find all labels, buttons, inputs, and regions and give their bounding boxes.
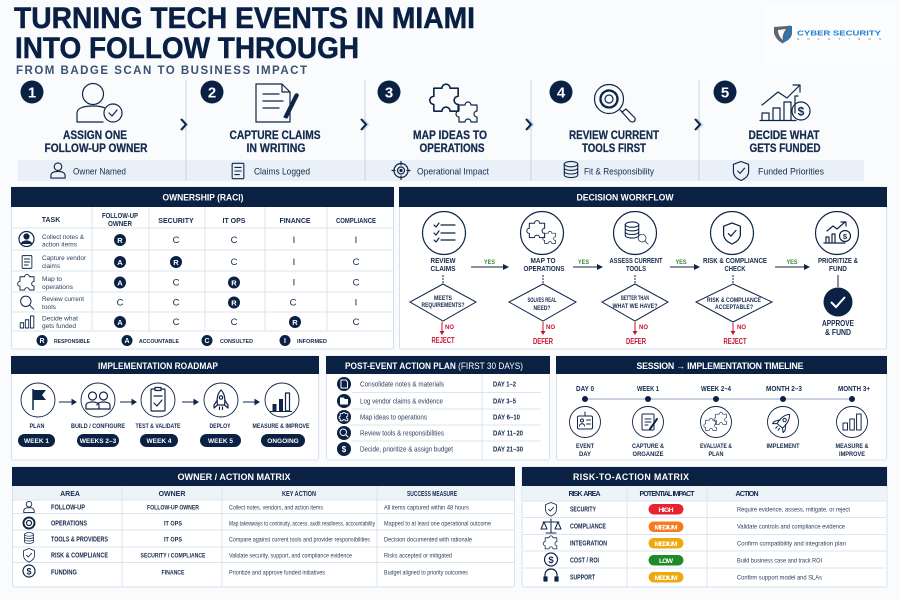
stage: assess current tools [610, 212, 663, 273]
decision: better than what we have: WHAT WE HAVE? [612, 303, 658, 310]
stage: build / configure: WEEKS 2–3 [80, 438, 117, 445]
row: operations: IT OPS [164, 520, 183, 528]
stage: assess current tools: TOOLS [626, 264, 646, 273]
row: decide what gets funded [20, 316, 360, 330]
step heading [44, 128, 148, 155]
column header row: SUCCESS MEASURE [407, 491, 457, 498]
decision: meets requirements: NO [445, 325, 454, 331]
row: decide what gets funded: C [353, 317, 360, 328]
row: capture vendor claims: I [293, 257, 295, 268]
table header row: FINANCE [279, 218, 311, 225]
panel header [11, 356, 319, 374]
row: review current tools: C [117, 298, 124, 308]
step heading [748, 128, 821, 155]
step 5 [714, 80, 824, 180]
row: tools and providers [24, 533, 472, 544]
arrow: yes 4 [775, 259, 810, 270]
decision: better than what we have: BETTER THAN [621, 295, 649, 302]
panel: ownership RACI [11, 187, 394, 349]
subtitle: FROM BADGE SCAN TO BUSINESS IMPACT [16, 65, 307, 77]
row: capture vendor claims [22, 255, 360, 270]
column header row: ACTION [736, 491, 758, 498]
row: funding: FINANCE [162, 570, 185, 576]
row: decide and budget: $ [342, 445, 347, 454]
row: review current tools: Review current [42, 296, 84, 303]
stage: plan: PLAN [30, 423, 45, 430]
panel: implementation roadmap [11, 356, 319, 460]
milestone: month 3+: IMPROVE [839, 451, 865, 458]
row: review tools [337, 426, 523, 440]
row: map ideas [337, 410, 520, 424]
row: capture vendor claims: Capture vendor [42, 255, 87, 262]
arrow: yes 3: YES [676, 259, 687, 266]
decision: meets requirements [410, 275, 476, 345]
step heading: ASSIGN ONE [63, 128, 127, 142]
row: tools and providers: Compare against current tools and provider responsibilities [229, 536, 371, 544]
panel header [522, 467, 887, 486]
step outcome: Fit & Responsibility [584, 166, 654, 178]
step 2 [200, 80, 320, 179]
row: decide what gets funded: C [231, 317, 238, 328]
row: risk and compliance: RISK & COMPLIANCE [51, 552, 108, 560]
legend: A [124, 338, 130, 345]
step heading: DECIDE WHAT [748, 128, 820, 142]
stage: assess current tools: ASSESS CURRENT [610, 256, 663, 265]
table grid [13, 486, 514, 587]
stage: prioritize and fund: $ [843, 232, 848, 241]
icon: puzzle pieces [430, 84, 477, 122]
row: log vendor claims: Log vendor claims & evidence [360, 398, 443, 406]
row: map to operations [18, 274, 360, 291]
legend: CONSULTED [220, 339, 253, 345]
stage: map to operations: OPERATIONS [524, 264, 564, 273]
column header row: POTENTIAL IMPACT [640, 491, 695, 498]
decision: risk and compliance acceptable: REJECT [724, 337, 747, 346]
step outcome: Funded Priorities [758, 166, 824, 178]
title: INTO FOLLOW THROUGH [15, 32, 359, 65]
arrow: yes 3 [670, 259, 700, 270]
row: follow-up: All items captured within 48 hours [384, 504, 470, 512]
row: integration [543, 536, 846, 549]
row: map to operations: I [293, 278, 295, 288]
row lines [352, 374, 541, 459]
row: decide and budget [337, 442, 523, 456]
row: risk and compliance: Risks accepted or mitigated [384, 552, 452, 560]
row: review tools: DAY 11–20 [493, 430, 523, 438]
stage: test and validate: WEEK 4 [147, 438, 172, 445]
stage: build / configure: BUILD / CONFIGURE [71, 423, 126, 430]
row: tools and providers: TOOLS & PROVIDERS [51, 536, 108, 544]
step outcome: Operational Impact [417, 166, 489, 178]
row: capture vendor claims: R [173, 258, 179, 267]
outcome: approve and fund: & FUND [825, 328, 851, 337]
milestone: day 0: DAY [579, 451, 591, 458]
step heading [413, 128, 487, 155]
arrow: yes 2: YES [578, 259, 590, 266]
row: integration: MEDIUM [654, 541, 678, 548]
row: compliance: Validate controls and compliance evidence [737, 524, 845, 530]
number badge 4: 4 [557, 84, 566, 102]
milestone: day 0: DAY 0 [576, 384, 594, 393]
step heading: CAPTURE CLAIMS [230, 128, 320, 142]
legend: ACCOUNTABLE [139, 339, 179, 345]
number badge 1: 1 [28, 84, 36, 102]
step heading: IN WRITING [246, 141, 306, 155]
legend: INFORMED [297, 339, 327, 345]
table header row: IT OPS [223, 218, 246, 225]
panel: owner / action matrix [12, 467, 515, 587]
panel header [326, 356, 550, 374]
row: compliance: MEDIUM [654, 524, 678, 532]
row: review current tools: C [173, 298, 180, 308]
decision: better than what we have: DEFER [626, 337, 646, 346]
step heading: MAP IDEAS TO [413, 128, 487, 142]
row: decide what gets funded: Decide what [42, 316, 78, 322]
row: decide what gets funded: A [117, 318, 123, 327]
row: risk and compliance [24, 549, 452, 562]
row: cost / ROI: Build business case and track ROI [737, 558, 822, 564]
number badge 3: 3 [385, 84, 393, 102]
step 3 [378, 80, 489, 180]
stage: plan [18, 383, 55, 447]
row: cost / ROI: LOW [659, 558, 674, 565]
decision: risk and compliance acceptable [696, 275, 772, 346]
stage: review claims [422, 212, 466, 273]
step outcome: Claims Logged [254, 166, 310, 178]
row: operations: OPERATIONS [51, 520, 87, 528]
stage: measure and improve [252, 383, 310, 447]
table header row: OWNER [108, 221, 132, 228]
milestone: week 2-4: WEEK 2–4 [701, 384, 732, 393]
row: tools and providers: IT OPS [164, 536, 183, 544]
milestone: week 1: CAPTURE & [632, 443, 664, 450]
row: collect notes: R [117, 236, 123, 245]
row: operations: Map takeaways to continuity, access, audit readiness, accountability [229, 520, 376, 528]
row: follow-up: Collect notes, vendors, and action items [229, 504, 324, 512]
title [14, 2, 475, 65]
stage: prioritize and fund [816, 212, 858, 273]
legend: I [284, 338, 286, 345]
panel header: OWNERSHIP (RACI) [162, 192, 244, 202]
title: TURNING TECH EVENTS IN MIAMI [14, 2, 475, 35]
row: funding: Prioritize and approve funded initiatives [229, 570, 326, 576]
row: cost / ROI: COST / ROI [570, 558, 599, 564]
stage: review claims: REVIEW [430, 256, 456, 265]
column header row: AREA [60, 491, 80, 498]
milestone: week 2-4 [700, 384, 732, 458]
panel: decision workflow [399, 187, 887, 349]
arrow [59, 400, 76, 404]
decision: solves real need: NO [546, 325, 555, 331]
step outcome: Owner Named [73, 166, 126, 178]
stage: risk and compliance check: CHECK [724, 264, 746, 273]
milestone: month 2-3 [766, 384, 802, 450]
step heading: GETS FUNDED [750, 141, 821, 155]
row: support: MEDIUM [654, 575, 678, 582]
stage: risk and compliance check [703, 212, 767, 273]
arrow [182, 400, 198, 404]
row: map to operations: C [353, 278, 360, 288]
panel header: POST-EVENT ACTION PLAN (FIRST 30 DAYS) [345, 361, 523, 371]
row: tools and providers: Decision documented with rationale [384, 536, 472, 544]
decision: meets requirements: REQUIREMENTS? [422, 302, 465, 309]
row: map to operations: operations [42, 284, 74, 291]
stage: test and validate: TEST & VALIDATE [136, 423, 181, 430]
step heading: OPERATIONS [420, 141, 484, 155]
row: compliance: COMPLIANCE [570, 524, 606, 530]
logo: Cyber Security Solutions: SOLUTIONS [797, 37, 881, 41]
stage: risk and compliance check: RISK & COMPLIANCE [703, 256, 767, 265]
row: integration: Confirm compatibility and integration plan [737, 540, 846, 548]
row: review current tools: I [355, 298, 357, 308]
panel header: SESSION → IMPLEMENTATION TIMELINE [636, 361, 804, 371]
outcome: approve and fund: APPROVE [822, 319, 855, 328]
row: consolidate notes [337, 377, 516, 391]
step heading: FOLLOW-UP OWNER [44, 141, 148, 155]
row: follow-up [24, 501, 470, 513]
stage: deploy: DEPLOY [210, 423, 231, 430]
row: integration: INTEGRATION [570, 540, 607, 548]
decision: risk and compliance acceptable: ACCEPTABLE? [715, 304, 753, 311]
row: review current tools [21, 296, 357, 311]
legend: RESPONSIBLE [54, 339, 90, 345]
stage: prioritize and fund: PRIORITIZE & [818, 256, 858, 265]
row: follow-up: FOLLOW-UP [51, 504, 85, 512]
row: funding: Budget aligned to priority outcomes [384, 570, 469, 576]
row: consolidate notes: DAY 1–2 [493, 382, 516, 388]
stage: deploy [200, 383, 241, 447]
logo: Cyber Security Solutions [765, 5, 895, 63]
row: security: Require evidence, assess, mitigate, or reject [737, 506, 850, 514]
table grid [523, 486, 886, 587]
column header row: OWNER [159, 491, 185, 498]
stage: map to operations [520, 212, 564, 273]
row: decide what gets funded: gets funded [42, 323, 76, 330]
row: collect notes: C [173, 235, 180, 246]
decision: better than what we have [602, 275, 668, 346]
step dividers and chevrons [181, 80, 702, 181]
milestone: week 2-4: PLAN [708, 451, 724, 458]
stage: map to operations: MAP TO [530, 256, 556, 265]
decision: solves real need [509, 275, 576, 346]
timeline line [585, 398, 852, 400]
icon: owner with check [77, 84, 122, 122]
row: log vendor claims: DAY 3–5 [493, 398, 516, 406]
icon: growth bars and dollar: $ [798, 104, 805, 118]
milestone: day 0: EVENT [576, 443, 595, 450]
row: review current tools: R [231, 298, 237, 307]
table header row: COMPLIANCE [336, 218, 376, 225]
row: log vendor claims [337, 394, 516, 408]
milestone: week 1: ORGANIZE [632, 451, 664, 458]
decision: better than what we have: NO [639, 325, 648, 331]
panel: post-event action plan [326, 356, 550, 460]
decision: meets requirements: REJECT [432, 336, 455, 345]
row: capture vendor claims: C [353, 257, 360, 268]
row: collect notes: Collect notes & [42, 234, 85, 241]
icon: gear under magnifier [594, 84, 635, 122]
row: follow-up: FOLLOW-UP OWNER [147, 504, 199, 512]
panel header: RISK-TO-ACTION MATRIX [573, 472, 689, 482]
row: review tools: Review tools & responsibilities [360, 430, 444, 438]
arrow [243, 400, 259, 404]
stage: measure and improve: MEASURE & IMPROVE [252, 423, 310, 430]
row: decide what gets funded: C [173, 317, 180, 328]
row: consolidate notes: Consolidate notes & materials [360, 382, 444, 388]
milestone: month 2-3: IMPLEMENT [766, 443, 800, 450]
row: map to operations: Map to [42, 276, 62, 283]
step heading [569, 128, 660, 155]
row: cost / ROI [544, 553, 822, 566]
row: map ideas: Map ideas to operations [360, 414, 427, 422]
step 1 [20, 80, 148, 178]
stage: test and validate [136, 383, 181, 447]
row: capture vendor claims: C [231, 257, 238, 268]
panel header [556, 356, 887, 374]
decision: solves real need: DEFER [533, 337, 553, 346]
row: map ideas: DAY 6–10 [493, 414, 520, 422]
row: support: Confirm support model and SLAs [737, 574, 823, 582]
row: map to operations: R [231, 278, 237, 287]
row: funding: FUNDING [51, 570, 77, 576]
panel header: OWNER / ACTION MATRIX [178, 472, 291, 482]
row: cost / ROI: $ [548, 555, 554, 566]
column header row: KEY ACTION [282, 491, 316, 498]
row: map to operations: C [173, 278, 180, 288]
step heading: TOOLS FIRST [582, 141, 647, 155]
row: collect notes [19, 232, 357, 248]
column header row [523, 486, 886, 500]
milestone: month 2-3: MONTH 2–3 [766, 384, 802, 393]
panel header: DECISION WORKFLOW [576, 192, 674, 202]
table header row: FOLLOW-UP [102, 213, 138, 220]
table header row [42, 213, 376, 228]
milestone: month 3+ [836, 384, 871, 458]
row: operations: Mapped to at least one operational outcome [384, 520, 491, 528]
row: decide and budget: Decide, prioritize & assign budget [360, 446, 453, 454]
row: collect notes: I [355, 235, 357, 246]
row: map to operations: A [117, 278, 123, 287]
step heading: REVIEW CURRENT [569, 128, 660, 142]
milestone: day 0 [570, 384, 600, 458]
panel: session to implementation timeline [556, 356, 887, 460]
panel header [12, 467, 515, 486]
legend [36, 335, 327, 346]
table grid [11, 207, 393, 331]
row: collect notes: I [293, 235, 295, 246]
step 4 [550, 80, 660, 178]
row: compliance [541, 519, 845, 533]
logo: Cyber Security Solutions: CYBER SECURITY [797, 28, 881, 38]
stage: measure and improve: ONGOING [267, 438, 299, 445]
column header row [13, 486, 514, 500]
stage: plan: WEEK 1 [24, 438, 49, 445]
table header row: SECURITY [158, 218, 194, 225]
row: funding [23, 565, 469, 577]
decision: solves real need: NEED? [534, 305, 551, 312]
number badge 2: 2 [208, 84, 216, 102]
decision: meets requirements: MEETS [434, 295, 452, 302]
number badge 5: 5 [721, 84, 729, 102]
row: decide and budget: DAY 21–30 [493, 446, 523, 454]
row: collect notes: action items [42, 242, 78, 248]
arrow [120, 400, 136, 404]
row: security: SECURITY [570, 506, 596, 514]
row: risk and compliance: SECURITY / COMPLIANCE [140, 552, 206, 560]
milestone: week 1 [632, 384, 664, 458]
row: review current tools: tools [42, 304, 57, 311]
panel header [11, 187, 394, 207]
icon: document and pen [256, 84, 298, 122]
step labels band [18, 160, 864, 181]
row: support: SUPPORT [570, 574, 596, 582]
legend: R [39, 338, 45, 345]
row: support [544, 569, 823, 582]
milestone: month 3+: MONTH 3+ [838, 384, 871, 393]
row: capture vendor claims: A [117, 258, 123, 267]
panel header [399, 187, 887, 207]
outcome: approve and fund [822, 275, 855, 337]
row: funding: $ [26, 566, 32, 576]
decision: risk and compliance acceptable: NO [737, 325, 746, 331]
stage: build / configure [71, 383, 126, 447]
row: security [546, 503, 850, 516]
milestone: week 2-4: EVALUATE & [700, 443, 732, 450]
row: capture vendor claims: claims [42, 263, 61, 270]
decision: solves real need: SOLVES REAL [528, 297, 557, 304]
row: risk and compliance: Validate security, support, and compliance evidence [229, 552, 352, 560]
milestone: week 1: WEEK 1 [637, 384, 659, 393]
arrow: yes 2 [573, 259, 603, 270]
step heading [230, 128, 320, 155]
table header row: TASK [42, 217, 60, 224]
stage: deploy: WEEK 5 [208, 438, 233, 445]
stage: prioritize and fund: FUND [829, 264, 847, 273]
panel: risk-to-action matrix [522, 467, 887, 587]
milestone: month 3+: MEASURE & [836, 443, 869, 450]
arrow: yes 1: YES [484, 259, 496, 266]
arrow: yes 4: YES [786, 259, 798, 266]
panel header: IMPLEMENTATION ROADMAP [98, 361, 218, 371]
row: decide what gets funded: R [292, 318, 298, 327]
legend: C [204, 338, 210, 345]
row: security: HIGH [658, 507, 674, 514]
decision: risk and compliance acceptable: RISK & COMPLIANCE [707, 297, 761, 304]
row: review current tools: C [290, 298, 297, 308]
column header row: RISK AREA [568, 491, 600, 498]
row: collect notes: C [231, 235, 238, 246]
row: operations [24, 518, 491, 528]
arrow: yes 1 [471, 259, 509, 270]
stage: review claims: CLAIMS [430, 264, 456, 273]
